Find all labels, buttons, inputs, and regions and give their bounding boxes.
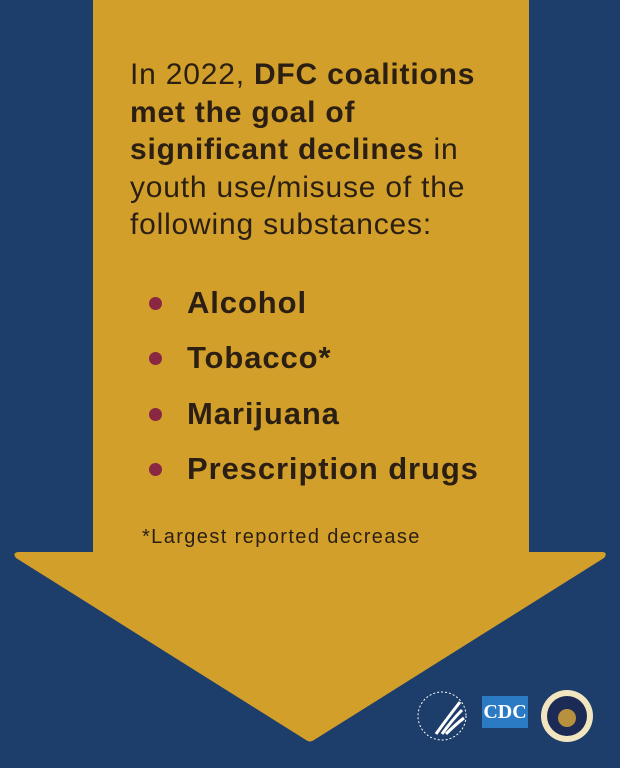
bullet list: Alcohol <box>187 285 307 320</box>
icon: CDC <box>482 696 528 728</box>
icon: CDC: CDC <box>483 701 527 723</box>
icon: seal <box>541 690 593 742</box>
heading text: In 2022, DFC coalitions <box>130 58 475 91</box>
footnote: *Largest reported decrease <box>142 526 421 548</box>
logos <box>418 690 593 742</box>
heading text: following substances: <box>130 208 432 241</box>
heading text <box>130 58 475 241</box>
bullet list: Tobacco* <box>187 340 331 375</box>
bullet list: Prescription drugs <box>187 451 479 486</box>
heading text: met the goal of <box>130 96 355 129</box>
heading text: youth use/misuse of the <box>130 171 465 204</box>
bullet list <box>149 285 479 486</box>
heading text: significant declines in <box>130 133 459 166</box>
bullet list: Marijuana <box>187 396 340 431</box>
icon: HHS <box>418 692 466 740</box>
